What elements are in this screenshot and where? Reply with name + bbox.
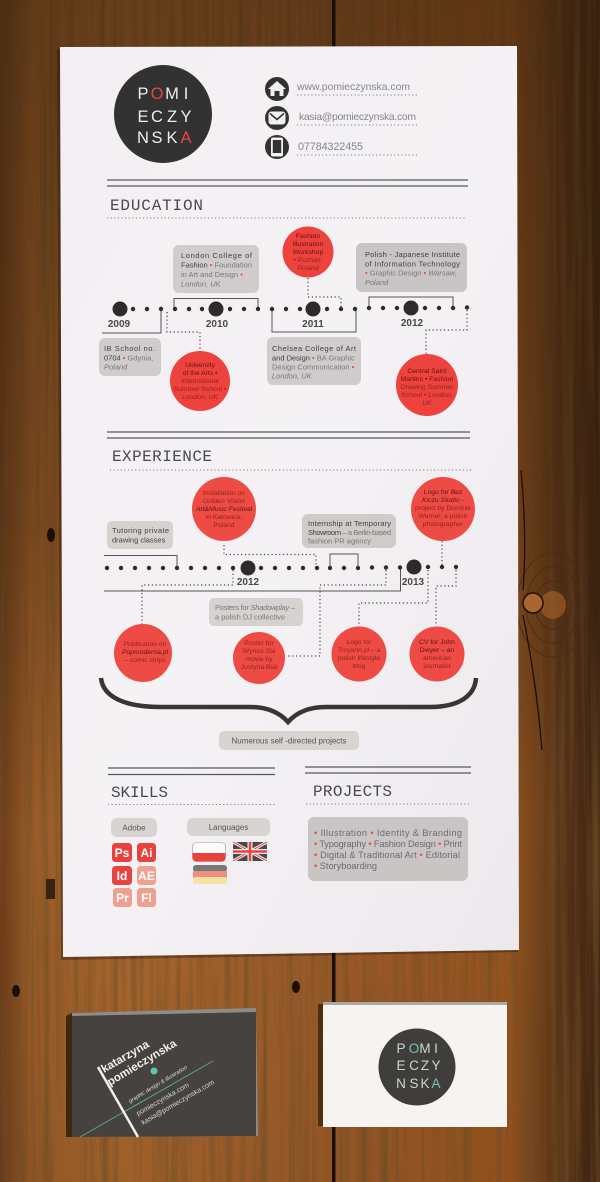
- circle: Poster for Wynos Sia: Justyna Biał: [241, 664, 278, 671]
- box: Internship: Internship at Temporary: [308, 519, 391, 528]
- circle: Publication: Publication on: [124, 641, 167, 648]
- circle: Poster for Wynos Sia: Wynos Sia: [243, 648, 275, 655]
- circle: University of the Arts: London, UK: [182, 394, 218, 401]
- circle: University of the Arts: International: [181, 378, 219, 385]
- business card: white: Z: [421, 1058, 429, 1073]
- box: London College of Fashion: London College of: [181, 251, 253, 260]
- circle: Fashion Illustration Workshop: Workshop: [293, 249, 323, 256]
- business card: dark: graphic design & illustration: [128, 1065, 189, 1105]
- box: London College of Fashion: Fashion • Foundation: [181, 260, 252, 270]
- icon: envelope: [265, 106, 289, 130]
- flag: Germany: [193, 865, 227, 884]
- logo: M: [165, 85, 179, 103]
- heading: skills: SKILLS: [111, 784, 168, 802]
- circle: Central Saint Martins: School • London,: [401, 392, 453, 399]
- experience timeline: 2012: [237, 577, 260, 588]
- logo: A: [180, 129, 192, 147]
- circle: Central Saint Martins: UK: [422, 400, 432, 407]
- circle: Publication: Popmoderna.pl: [122, 649, 169, 656]
- email: kasia@pomieczynska.com: [299, 112, 416, 123]
- box: Tutoring: drawing classes: [112, 536, 166, 544]
- education timeline: [102, 278, 469, 354]
- box: London College of Fashion: in Art and Design •: [181, 270, 243, 279]
- box: Chelsea College: Design Communication •: [272, 362, 354, 372]
- box: Chelsea College: [267, 337, 361, 385]
- adobe icons: Ai: [140, 846, 152, 860]
- circle: Installation: Art&Music Festival: [195, 506, 253, 513]
- circle: Fashion Illustration Workshop: • Poznan,: [293, 257, 323, 264]
- phone number: 07784322455: [298, 141, 363, 153]
- logo: E: [137, 108, 149, 126]
- circle: Logo for Troyann.pl: polish lifestyle: [338, 655, 380, 662]
- circle: Fashion Illustration Workshop: Fashion: [296, 233, 320, 240]
- circle: CV for John Dwyer: [410, 626, 464, 682]
- projects list: • Digital & Traditional Art • Editorial: [314, 850, 460, 860]
- circle: Poster for Wynos Sia: Poster for: [244, 640, 274, 647]
- circle: Installation: Poland: [213, 522, 235, 529]
- experience timeline: 2013: [402, 577, 425, 588]
- logo: [114, 65, 212, 163]
- circle: Central Saint Martins: Central Saint: [407, 368, 447, 375]
- box: self-directed projects: Numerous self -directed projects: [232, 736, 346, 746]
- curly brace: [101, 678, 476, 722]
- adobe icons: [112, 843, 156, 907]
- box: IB School: [99, 338, 161, 376]
- education timeline: 2010: [206, 319, 229, 330]
- box: IB School: IB School no.: [104, 344, 155, 353]
- adobe icons: Pr: [116, 891, 129, 905]
- circle: University of the Arts: [170, 351, 230, 411]
- flag: Poland: [192, 842, 226, 862]
- icon: house: [265, 77, 289, 101]
- business card: dark: [66, 1008, 258, 1137]
- circle: Poster for Wynos Sia: movie by: [245, 656, 273, 663]
- education timeline: 2012: [401, 318, 424, 329]
- business card: dark: pomieczynska: [105, 1037, 179, 1089]
- box: Posters for Shadowplay: a polish DJ collective: [215, 612, 285, 622]
- circle: Logo for Troyann.pl: Troyann.pl – a: [338, 647, 380, 654]
- projects list: • Storyboarding: [314, 861, 377, 871]
- heading: education: EDUCATION: [110, 197, 203, 215]
- circle: Fashion Illustration Workshop: Illustration: [293, 241, 324, 248]
- circle: Logo for Troyann.pl: [332, 626, 386, 682]
- box: Polish-Japanese Institute: [356, 243, 467, 292]
- website: www.pomieczynska.com: [296, 82, 410, 93]
- circle: Publication: – comic strips: [124, 657, 166, 664]
- circle: CV for John Dwyer: CV for John: [419, 639, 455, 646]
- circle: Installation: Golden Vision: [203, 498, 245, 505]
- business card: white: C: [409, 1058, 419, 1073]
- business card: dark: pomieczynska.com: [136, 1082, 191, 1118]
- box: London College of Fashion: London, UK: [181, 280, 222, 288]
- circle: Logo for Bez Kiczu Studio: Logo for Bez: [424, 489, 462, 496]
- circle: Logo for Bez Kiczu Studio: project by Dominik: [415, 505, 472, 512]
- adobe icons: Id: [117, 869, 127, 883]
- logo: Z: [167, 108, 177, 126]
- circle: Logo for Bez Kiczu Studio: [411, 477, 475, 541]
- heading: experience: EXPERIENCE: [112, 448, 212, 466]
- box: London College of Fashion: [173, 245, 259, 293]
- box: Posters for Shadowplay: Posters for Shadowplay –: [215, 603, 295, 612]
- circle: Central Saint Martins: Martins • Fashion: [401, 376, 454, 383]
- adobe icons: Fl: [141, 891, 152, 905]
- languages label: [187, 818, 270, 836]
- experience timeline: [104, 541, 458, 656]
- box: Polish-Japanese Institute: Poland: [365, 278, 389, 287]
- box: Polish-Japanese Institute: of Information Technology: [365, 260, 460, 268]
- circle: Fashion Illustration Workshop: Poland: [297, 265, 319, 272]
- circle: Logo for Bez Kiczu Studio: Werner, a polish: [418, 513, 468, 520]
- circle: Installation: Installation on: [203, 490, 245, 497]
- circle: Publication: [114, 624, 172, 682]
- adobe icons: Ps: [115, 846, 130, 860]
- business card: white: [318, 1002, 507, 1127]
- phone number: [297, 141, 419, 155]
- business card: white: O: [409, 1041, 419, 1056]
- business card: white: N: [396, 1076, 406, 1091]
- circle: Central Saint Martins: [396, 354, 458, 416]
- business card: white: K: [420, 1076, 430, 1091]
- circle: CV for John Dwyer: Dwyer – an: [420, 647, 454, 654]
- box: IB School: 0704 • Gdynia,: [104, 354, 153, 362]
- adobe icons: AE: [138, 869, 155, 883]
- circle: Central Saint Martins: Drawing Summer: [401, 384, 454, 391]
- education timeline: 2009: [108, 319, 131, 330]
- business card: white: I: [434, 1041, 438, 1056]
- education timeline: 2011: [302, 319, 324, 330]
- circle: Fashion Illustration Workshop: [282, 226, 334, 278]
- circle: University of the Arts: University: [185, 362, 216, 369]
- projects list: • Illustration • Identity & Branding: [314, 828, 462, 838]
- projects list: • Typography • Fashion Design • Print: [314, 839, 462, 849]
- logo: N: [137, 129, 149, 147]
- business card: white: S: [409, 1076, 419, 1091]
- circle: Installation: [192, 477, 256, 541]
- box: Chelsea College: London, UK: [272, 372, 313, 380]
- business card: white: A: [431, 1076, 441, 1091]
- box: Tutoring: [107, 521, 173, 549]
- business card: white: Y: [431, 1058, 441, 1073]
- box: Polish-Japanese Institute: Polish - Japanese Institute: [365, 250, 460, 259]
- flag: UK: [233, 842, 267, 861]
- business card: dark: katarzyna: [100, 1038, 152, 1076]
- circle: University of the Arts: Summer School •: [174, 386, 227, 393]
- business card: white: P: [396, 1041, 406, 1056]
- box: IB School: Poland: [104, 362, 128, 372]
- box: Polish-Japanese Institute: • Graphic Design • Warsaw,: [365, 268, 457, 278]
- circle: Logo for Bez Kiczu Studio: Kiczu Studio -: [422, 497, 465, 504]
- logo: C: [151, 108, 163, 126]
- languages label: Languages: [209, 823, 248, 832]
- box: Posters for Shadowplay: [209, 598, 303, 626]
- circle: CV for John Dwyer: american: [423, 655, 451, 662]
- logo: I: [184, 85, 188, 103]
- box: Tutoring: Tutoring private: [112, 526, 169, 535]
- adobe label: [111, 818, 157, 837]
- paper sheet: [57, 46, 519, 960]
- logo: P: [137, 85, 149, 103]
- circle: Logo for Bez Kiczu Studio: photographer: [423, 521, 464, 528]
- logo: S: [151, 129, 163, 147]
- box: Chelsea College: and Design • BA Graphic: [272, 354, 355, 362]
- box: Internship: Showroom – a Berlin-based: [308, 528, 391, 537]
- business card: white: M: [419, 1041, 431, 1056]
- circle: University of the Arts: of the Arts •: [183, 370, 218, 377]
- circle: CV for John Dwyer: journalist: [422, 663, 451, 670]
- box: Chelsea College: Chelsea College of Art: [272, 344, 357, 353]
- business card: white: E: [396, 1058, 406, 1073]
- circle: Installation: in Katowice,: [206, 514, 242, 521]
- heading: projects: PROJECTS: [313, 783, 392, 801]
- logo: K: [166, 129, 178, 147]
- icon: phone: [265, 135, 289, 159]
- box: Internship: fashion PR agency: [308, 536, 371, 546]
- business card: dark: kasia@pomieczynska.com: [140, 1079, 216, 1127]
- box: Internship: [302, 514, 396, 548]
- circle: Logo for Troyann.pl: Logo for: [347, 639, 372, 646]
- circle: Poster for Wynos Sia: [233, 632, 285, 684]
- logo: Y: [180, 108, 192, 126]
- logo: O: [151, 85, 164, 103]
- projects list: [308, 817, 468, 881]
- circle: Logo for Troyann.pl: blog: [353, 663, 366, 670]
- box: self-directed projects: [219, 731, 359, 750]
- adobe label: Adobe: [122, 824, 146, 832]
